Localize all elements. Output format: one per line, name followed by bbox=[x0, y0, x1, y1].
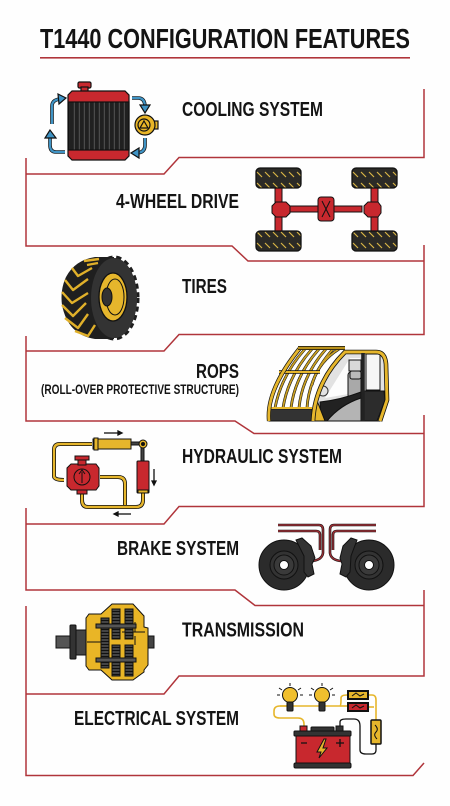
label: ROPS bbox=[41, 360, 239, 397]
label: electrical system: ELECTRICAL SYSTEM bbox=[74, 707, 239, 730]
label: transmission: TRANSMISSION bbox=[182, 618, 304, 642]
icon: ROPS cab bbox=[268, 348, 387, 421]
label: tires: TIRES bbox=[182, 275, 227, 298]
icon: tire bbox=[62, 257, 137, 339]
label: ROPS: ROPS bbox=[196, 360, 239, 383]
label: 4-wheel drive: 4-WHEEL DRIVE bbox=[116, 190, 239, 213]
icon: 4-wheel drive bbox=[256, 168, 397, 251]
label: ROPS: (ROLL-OVER PROTECTIVE STRUCTURE) bbox=[41, 382, 239, 397]
label: hydraulic system: HYDRAULIC SYSTEM bbox=[182, 445, 342, 468]
label: brake system: BRAKE SYSTEM bbox=[117, 537, 239, 560]
icon: brake system bbox=[259, 525, 394, 590]
icon: electrical system bbox=[274, 683, 381, 768]
icon: transmission bbox=[56, 604, 154, 680]
section divider lines bbox=[26, 89, 424, 776]
icon: hydraulic system bbox=[54, 431, 156, 516]
icon: cooling system bbox=[45, 82, 158, 160]
label: cooling system: COOLING SYSTEM bbox=[182, 98, 323, 121]
